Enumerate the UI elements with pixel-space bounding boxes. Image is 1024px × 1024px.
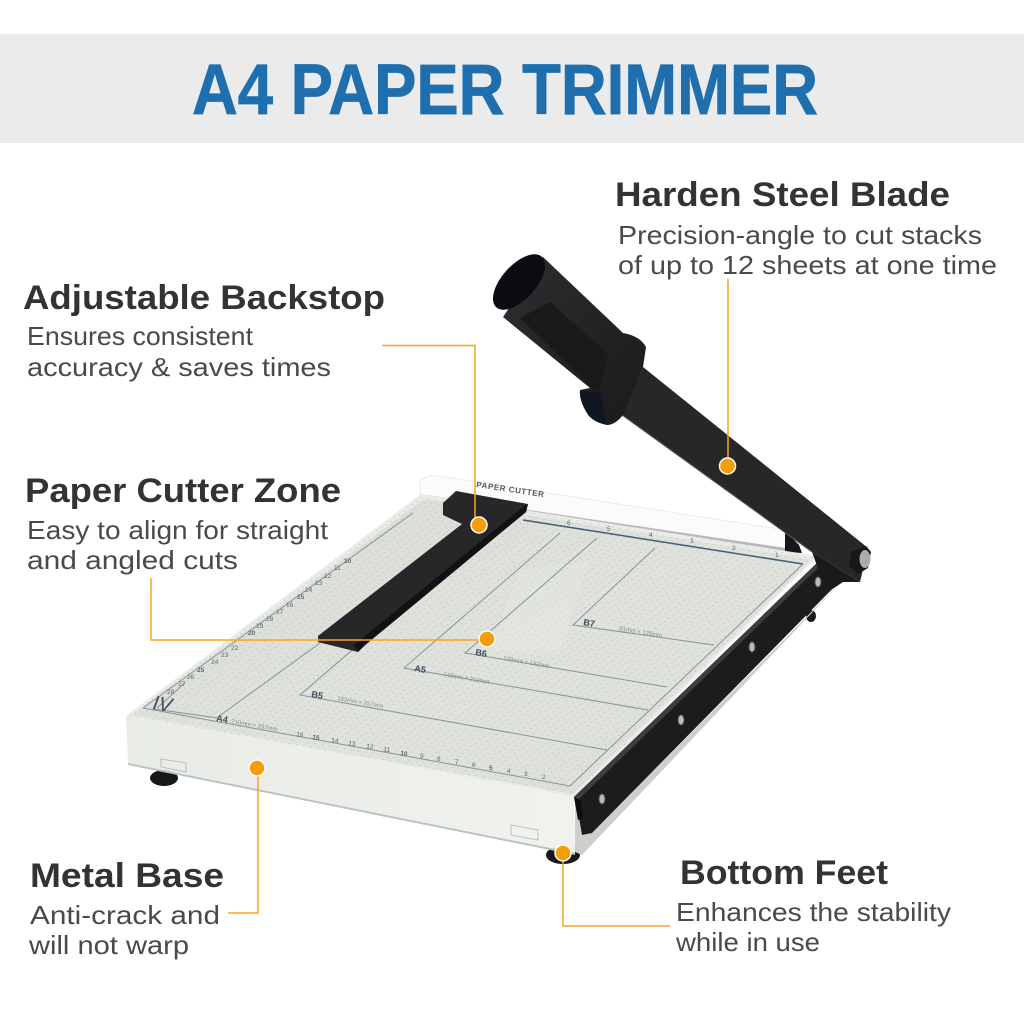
- top ruler numbers: [567, 520, 779, 559]
- top ruler numbers: 1: [775, 552, 779, 559]
- bottom ruler numbers: 2: [542, 774, 546, 781]
- size labels: B6: [475, 647, 488, 659]
- left ruler numbers: 17: [276, 609, 284, 616]
- cutter zone description: and angled cuts: [27, 545, 238, 575]
- handle end cap: [484, 245, 554, 319]
- title banner: [0, 34, 1024, 143]
- bottom ruler numbers: 12: [366, 743, 374, 751]
- size labels: 210mm × 297mm: [231, 719, 278, 733]
- adjustable backstop bar: [318, 491, 528, 652]
- metal base description: will not warp: [28, 930, 189, 960]
- callout: bottom feet: [555, 845, 951, 957]
- size labels: 182mm × 257mm: [337, 696, 384, 710]
- bottom ruler numbers: 7: [455, 759, 459, 766]
- cutting board surface: [126, 494, 814, 797]
- rail screws: [599, 577, 821, 804]
- cutting arm: [622, 367, 871, 592]
- size labels: [151, 617, 663, 733]
- cutter zone description: Easy to align for straight: [27, 515, 329, 545]
- left ruler numbers: 24: [211, 659, 219, 666]
- callout: cutter zone: [25, 472, 495, 647]
- blade description: [618, 220, 997, 280]
- bottom ruler numbers: 16: [296, 731, 304, 739]
- bottom feet description: [675, 897, 951, 957]
- blade heading: Harden Steel Blade: [615, 176, 950, 214]
- bottom ruler numbers: 8: [437, 756, 441, 763]
- callout: metal base: [28, 760, 265, 960]
- blade description: of up to 12 sheets at one time: [618, 250, 997, 280]
- title: A4 PAPER TRIMMER: [192, 51, 818, 130]
- size labels: IV: [151, 692, 175, 717]
- blade description: Precision-angle to cut stacks: [618, 220, 982, 250]
- backstop heading: Adjustable Backstop: [23, 279, 385, 317]
- size labels: B5: [311, 689, 324, 701]
- glare on board: [490, 560, 590, 650]
- blade leader: [720, 279, 736, 474]
- size labels: 148mm × 210mm: [443, 672, 490, 686]
- left ruler numbers: 14: [305, 587, 313, 594]
- bottom ruler numbers: 14: [331, 737, 339, 745]
- left ruler numbers: 25: [197, 667, 205, 674]
- metal base heading: Metal Base: [30, 857, 224, 895]
- bottom ruler numbers: 13: [348, 740, 356, 748]
- top ruler numbers: 6: [567, 520, 571, 527]
- left ruler numbers: 16: [286, 602, 294, 609]
- bottom feet leader: [555, 845, 670, 926]
- cutter zone description: [27, 515, 329, 575]
- left ruler numbers: 20: [248, 630, 256, 637]
- bottom ruler numbers: 15: [312, 734, 320, 742]
- bottom feet heading: Bottom Feet: [680, 854, 888, 892]
- size labels: 91mm × 128mm: [619, 626, 663, 640]
- size labels: 128mm × 182mm: [503, 656, 550, 670]
- top ruler numbers: 5: [607, 526, 611, 533]
- backstop description: accuracy & saves times: [27, 352, 331, 382]
- left ruler numbers: 10: [344, 558, 352, 565]
- bottom ruler numbers: 9: [420, 753, 424, 760]
- pivot bolt: [849, 546, 871, 574]
- metal base leader: [228, 760, 265, 913]
- bottom ruler numbers: 4: [507, 768, 511, 775]
- left ruler numbers: [167, 558, 352, 696]
- metal base description: Anti-crack and: [30, 900, 220, 930]
- backstop fence: [420, 475, 802, 553]
- top ruler numbers: 3: [690, 538, 694, 545]
- bottom ruler numbers: 3: [524, 771, 528, 778]
- bottom ruler numbers: 11: [383, 746, 391, 754]
- backstop fence: PAPER CUTTER: [476, 480, 545, 499]
- metal base description: [28, 900, 220, 960]
- left ruler numbers: 22: [231, 645, 239, 652]
- left ruler numbers: 18: [266, 616, 274, 623]
- left ruler numbers: 12: [324, 573, 332, 580]
- left ruler numbers: 13: [315, 580, 323, 587]
- bottom ruler numbers: 10: [400, 750, 408, 758]
- cutter zone heading: Paper Cutter Zone: [25, 472, 341, 510]
- size labels: A5: [414, 663, 427, 675]
- left ruler numbers: 27: [178, 681, 186, 688]
- cutter zone leader: [151, 578, 495, 647]
- size labels: B7: [583, 617, 596, 629]
- left ruler numbers: 11: [334, 565, 341, 572]
- left ruler numbers: 26: [187, 674, 195, 681]
- left ruler numbers: 15: [297, 594, 305, 601]
- top ruler numbers: 2: [732, 545, 736, 552]
- left ruler numbers: 28: [167, 689, 175, 696]
- paper trimmer illustration: [100, 245, 871, 864]
- arm to rail joint: [812, 552, 860, 592]
- size labels: A4: [216, 713, 229, 725]
- ruler lines: [143, 513, 803, 786]
- callout: backstop: [23, 279, 487, 533]
- grip recess: [520, 302, 608, 392]
- bottom ruler numbers: 5: [489, 765, 493, 772]
- callout: blade: [615, 176, 997, 474]
- bottom feet description: while in use: [675, 927, 820, 957]
- bottom feet description: Enhances the stability: [676, 897, 951, 927]
- backstop leader: [382, 346, 487, 533]
- front clips: [161, 759, 538, 840]
- metal base front face: [126, 580, 843, 855]
- bottom ruler numbers: 6: [472, 762, 476, 769]
- backstop description: Ensures consistent: [27, 321, 254, 351]
- paper size guides: [218, 533, 714, 750]
- left ruler numbers: 19: [256, 623, 264, 630]
- backstop description: [27, 321, 331, 382]
- left ruler numbers: 23: [221, 652, 229, 659]
- blade rail: [574, 562, 843, 835]
- top ruler numbers: 4: [649, 532, 653, 539]
- bottom feet: [150, 610, 816, 864]
- side underside: [575, 580, 843, 855]
- cutting arm handle: [484, 245, 646, 425]
- bottom ruler numbers: [296, 731, 546, 781]
